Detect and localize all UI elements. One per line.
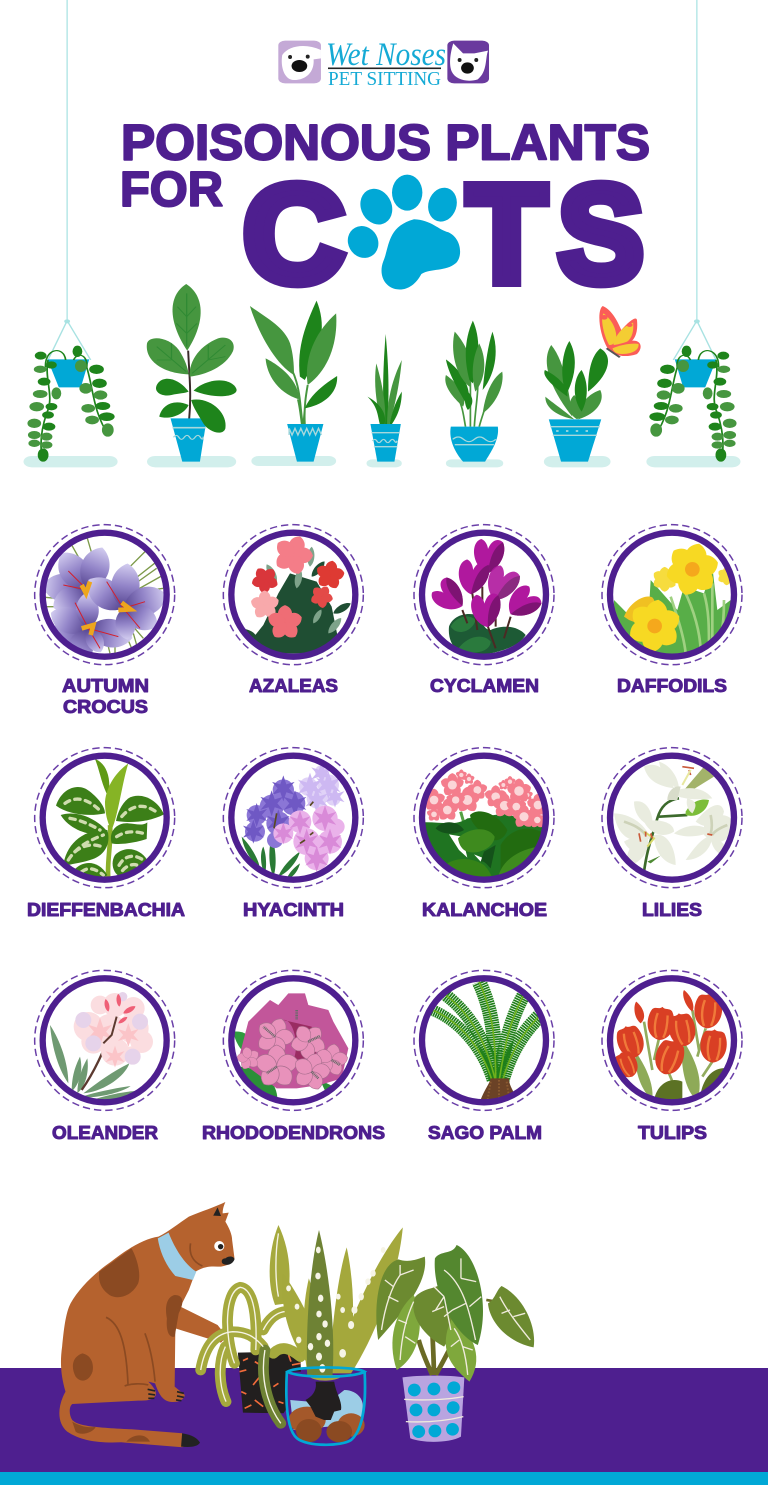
label: CYCLAMEN bbox=[430, 676, 539, 696]
divider bbox=[328, 68, 441, 69]
icon: daffodils bbox=[602, 525, 742, 665]
icon: tulips bbox=[602, 970, 742, 1110]
potted plant 5 bbox=[544, 341, 611, 467]
label: SAGO PALM bbox=[428, 1123, 542, 1143]
floor band bbox=[0, 1368, 768, 1472]
label: RHODODENDRONS bbox=[202, 1123, 385, 1143]
plant card: sago palm bbox=[414, 970, 554, 1143]
text: brand name: Wet Noses bbox=[326, 37, 446, 73]
plant card: azaleas bbox=[223, 525, 363, 696]
icon: paw print bbox=[346, 175, 460, 289]
plant card: tulips bbox=[602, 970, 742, 1143]
icon: hyacinth bbox=[223, 748, 363, 888]
label: CROCUS bbox=[63, 697, 148, 717]
spider plant bbox=[201, 1225, 311, 1423]
icon: rhododendrons bbox=[223, 970, 363, 1110]
heading line one: POISONOUS PLANTS bbox=[121, 114, 650, 170]
text: pet sitting: PET SITTING bbox=[328, 68, 441, 90]
icon: dieffenbachia bbox=[35, 748, 175, 888]
label: DIEFFENBACHIA bbox=[27, 900, 185, 920]
label: AUTUMN bbox=[62, 676, 149, 696]
label: OLEANDER bbox=[52, 1123, 158, 1143]
label: LILIES bbox=[642, 900, 702, 920]
potted plant 1 bbox=[147, 284, 237, 467]
plant card: autumn crocus bbox=[35, 525, 175, 717]
icon: oleander bbox=[35, 970, 175, 1110]
icon: kalanchoe bbox=[414, 748, 554, 888]
plant card: dieffenbachia bbox=[27, 748, 185, 920]
label: DAFFODILS bbox=[617, 676, 727, 696]
caladium plant in dotted pot bbox=[376, 1245, 534, 1442]
potted plant 2 bbox=[250, 301, 337, 466]
heading: S: S bbox=[558, 158, 644, 312]
icon: azaleas bbox=[223, 525, 363, 665]
aloe in glass bowl bbox=[282, 1227, 403, 1445]
heading: T: T bbox=[467, 158, 546, 312]
label: HYACINTH bbox=[243, 900, 344, 920]
label: KALANCHOE bbox=[422, 900, 547, 920]
icon: cyclamen bbox=[414, 525, 554, 665]
logo bbox=[278, 37, 489, 90]
plant card: kalanchoe bbox=[414, 748, 554, 920]
icon: cat face bbox=[447, 41, 489, 83]
icon: dog face bbox=[278, 41, 321, 83]
plant card: daffodils bbox=[602, 525, 742, 696]
icon: sago palm bbox=[414, 970, 554, 1110]
heading: for: FOR bbox=[120, 163, 223, 217]
plant card: lilies bbox=[602, 748, 742, 920]
label: AZALEAS bbox=[249, 676, 338, 696]
bottom scene bbox=[59, 1202, 534, 1447]
plant card: oleander bbox=[35, 970, 175, 1143]
hanging plant left bbox=[24, 0, 118, 467]
plant card: cyclamen bbox=[414, 525, 554, 696]
icon: autumn crocus bbox=[35, 525, 175, 671]
plant card: hyacinth bbox=[223, 748, 363, 920]
potted plant 3 bbox=[367, 334, 402, 467]
icon: lilies bbox=[602, 748, 742, 888]
cat bbox=[59, 1202, 234, 1447]
bottom stripe bbox=[0, 1472, 768, 1485]
plant card: rhododendrons bbox=[202, 970, 385, 1143]
potted plant 4 bbox=[445, 321, 503, 467]
title bbox=[120, 114, 650, 312]
hanging plant right bbox=[646, 0, 740, 467]
heading: C: C bbox=[243, 158, 345, 312]
label: TULIPS bbox=[638, 1123, 707, 1143]
icon: butterfly bbox=[599, 306, 641, 357]
label bbox=[62, 676, 149, 717]
row of potted plants bbox=[147, 284, 641, 467]
